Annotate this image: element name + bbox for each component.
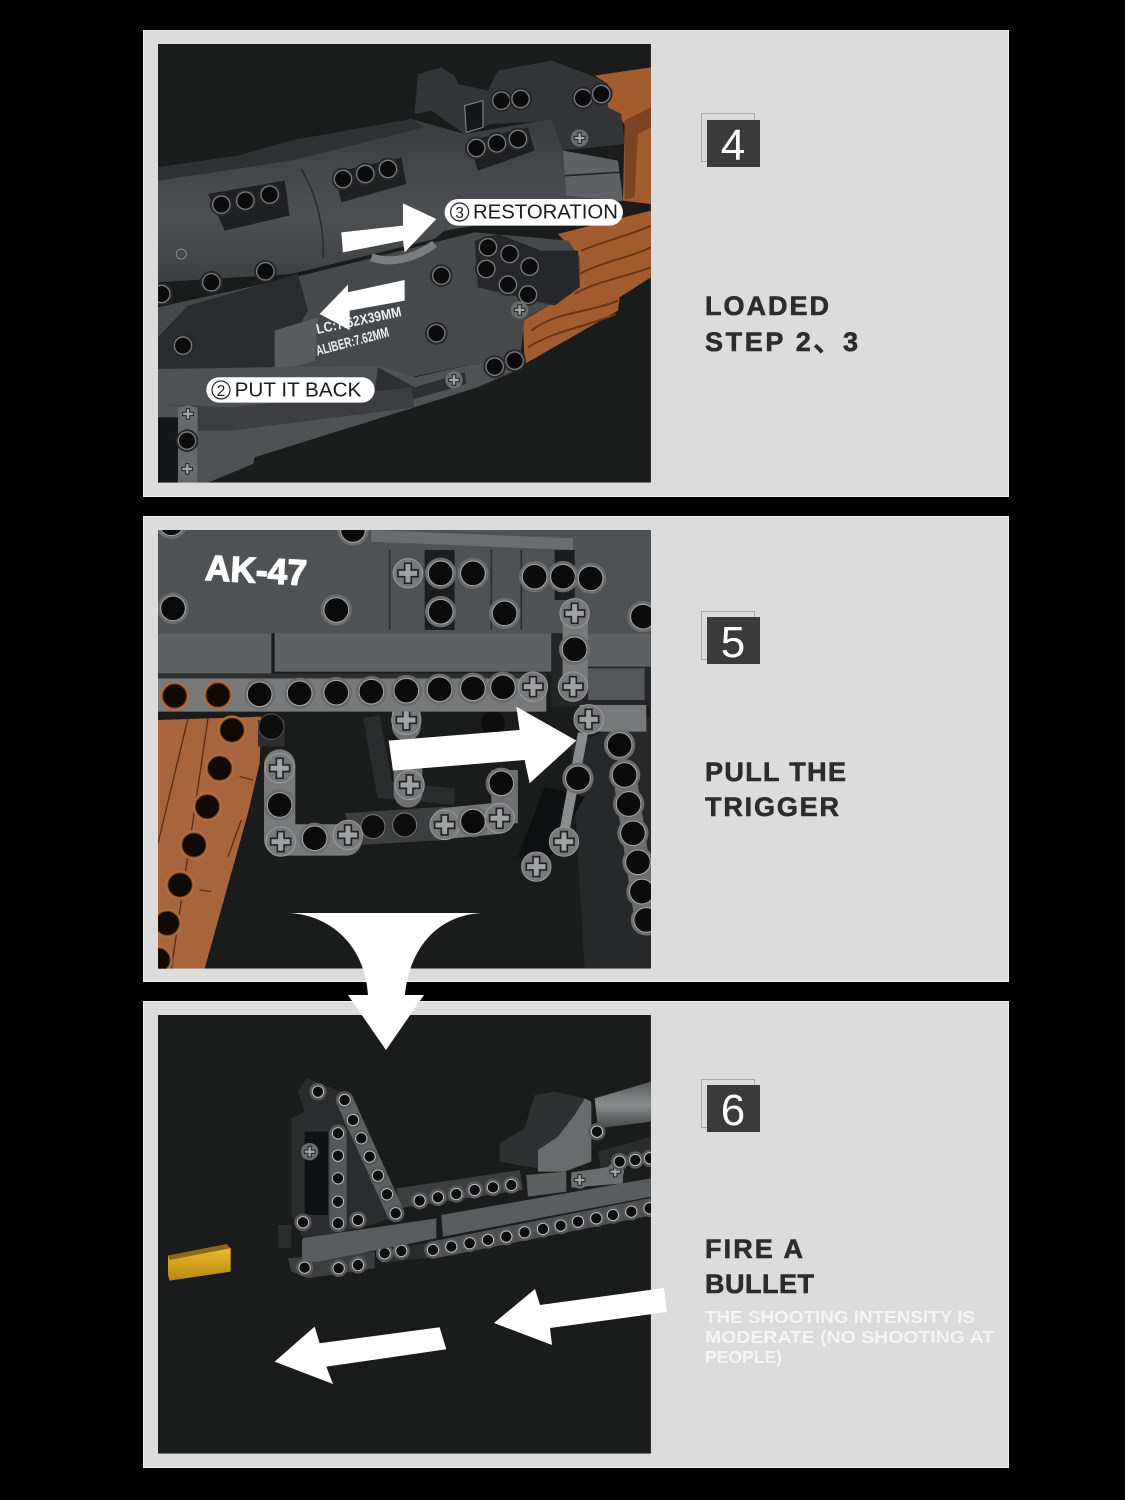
heading: fire a bullet: FIRE A	[705, 1234, 803, 1264]
bullet: gold brick	[168, 1244, 231, 1281]
step number 6: 6	[721, 1086, 745, 1135]
grey receiver body	[158, 530, 651, 706]
note: shooting intensity: PEOPLE)	[705, 1347, 782, 1367]
panel: step 5	[143, 508, 1009, 982]
photo: firing a bullet	[158, 1015, 659, 1454]
heading: fire a bullet	[705, 1234, 814, 1299]
arrow: bullet direction	[275, 1327, 446, 1384]
long horizontal liftarm	[158, 672, 548, 712]
heading: loaded step 2, 3: STEP 2、3	[705, 327, 858, 357]
trigger guard liftarms	[259, 705, 517, 856]
step number 4: 4	[721, 121, 745, 170]
base bars and hole rows	[278, 1150, 659, 1278]
heading: fire a bullet: BULLET	[705, 1269, 814, 1299]
heading: pull the trigger: TRIGGER	[705, 792, 839, 822]
note: shooting intensity: MODERATE (NO SHOOTING AT	[705, 1327, 994, 1347]
arrow: restoration direction	[341, 203, 436, 252]
heading: loaded step 2, 3: LOADED	[705, 291, 829, 321]
arrow: recoil, overlapping photo edge	[494, 1288, 667, 1345]
panel: step 6	[144, 1002, 1008, 1468]
callout: put it back: PUT IT BACK	[235, 380, 362, 402]
heading: pull the trigger: PULL THE	[705, 757, 846, 787]
heading: pull the trigger	[705, 757, 846, 822]
step number 4	[702, 114, 760, 170]
step number 6	[702, 1080, 760, 1135]
callout: restoration: 3	[455, 205, 464, 222]
wooden grip	[158, 715, 262, 969]
moving bolt, translucent	[158, 232, 580, 377]
lower handguard and grip	[158, 349, 526, 483]
photo: loaded gun mechanism	[150, 44, 651, 483]
upper receiver	[150, 61, 625, 305]
callout: put it back: 2	[217, 383, 225, 400]
callout: restoration: RESTORATION	[473, 201, 618, 223]
note: shooting intensity	[705, 1307, 994, 1367]
note: shooting intensity: THE SHOOTING INTENSITY IS	[705, 1307, 975, 1327]
callout: restoration	[445, 199, 623, 226]
label: AK-47: AK-47	[204, 547, 308, 593]
arrow: put back direction	[320, 280, 405, 330]
engraved labels: ALIBER:7.62MM	[314, 324, 391, 359]
rear sight with liftarms	[291, 1078, 521, 1242]
callout: put it back	[206, 377, 375, 403]
panel: step 4	[144, 30, 1008, 496]
step number 5: 5	[721, 618, 745, 667]
photo: trigger mechanism	[158, 530, 651, 969]
front sight and frame	[500, 1082, 651, 1197]
heading: loaded step 2, 3	[705, 291, 858, 357]
arrow: pull trigger	[389, 707, 576, 783]
engraved labels	[316, 306, 402, 356]
vertical link and trigger lever	[518, 599, 662, 969]
wood stock	[523, 67, 651, 364]
step number 5	[702, 612, 760, 667]
engraved labels: LC:7.62X39MM	[315, 303, 403, 337]
arrow: large flow arrow from step 5 to step 6	[289, 913, 482, 1050]
